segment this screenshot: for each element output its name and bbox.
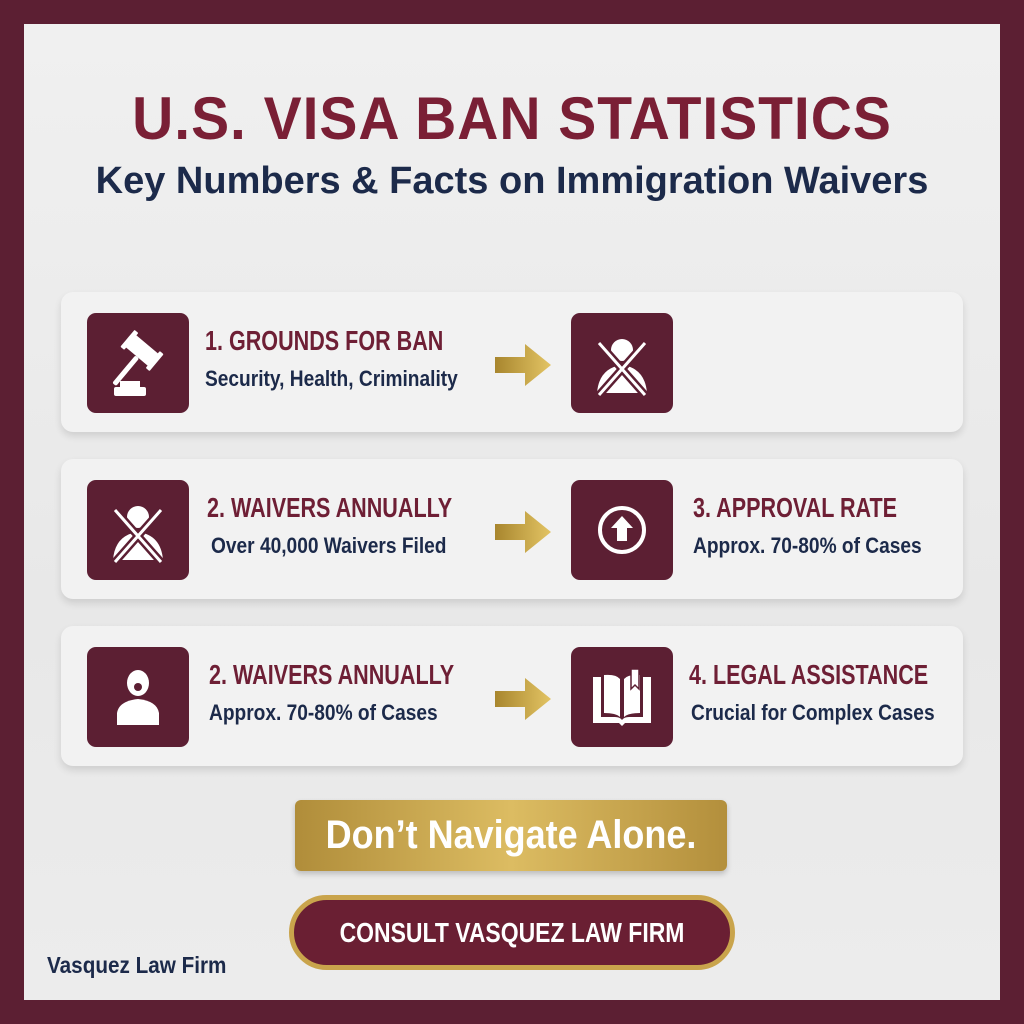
panel: row 3 [61,626,963,766]
icon: person [87,647,189,747]
panel: row 3: Crucial for Complex Cases [691,700,935,725]
footer brand: Vasquez Law Firm [47,952,226,978]
arrow [495,678,551,720]
text: approval rate: 3. APPROVAL RATE [693,492,897,523]
text: waivers annually: 2. WAIVERS ANNUALLY [207,492,452,523]
text: waivers annually: 2. WAIVERS ANNUALLY [209,659,454,690]
title: U.S. VISA BAN STATISTICS [132,85,892,152]
button: consult [289,895,735,970]
arrow [495,511,551,553]
panel: row 1 [61,292,963,432]
callout: dont navigate alone: Don’t Navigate Alone. [326,813,696,857]
panel: row 2: Over 40,000 Waivers Filed [211,533,446,558]
subtitle: Key Numbers & Facts on Immigration Waivers [96,160,928,202]
callout: dont navigate alone [295,800,727,871]
icon: book [571,647,673,747]
icon: gavel [87,313,189,413]
icon: person crossed [571,313,673,413]
button: consult: CONSULT VASQUEZ LAW FIRM [340,917,684,948]
arrow [495,344,551,386]
panel: row 3: Approx. 70-80% of Cases [209,700,438,725]
icon: person crossed [87,480,189,580]
panel: row 1: Security, Health, Criminality [205,366,458,391]
panel: row 2: Approx. 70-80% of Cases [693,533,922,558]
text: grounds: 1. GROUNDS FOR BAN [205,325,443,356]
panel: row 2 [61,459,963,599]
text: legal assistance: 4. LEGAL ASSISTANCE [689,659,928,690]
icon: up arrow circle [571,480,673,580]
